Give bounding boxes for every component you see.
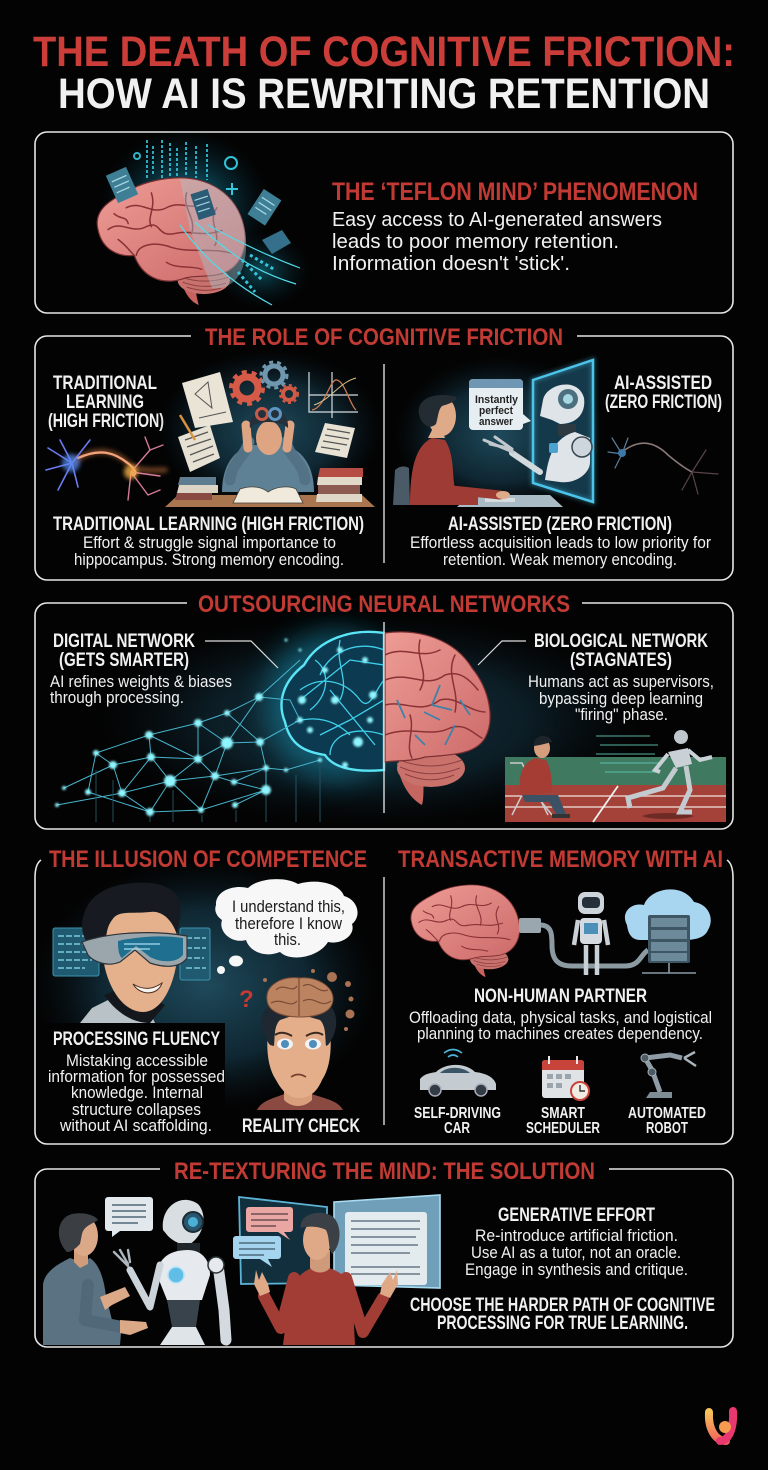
icon: logo [709,1411,733,1441]
label: biological network: "firing" phase. [575,706,668,724]
panel: teflon mind [35,130,733,313]
icon: dim neuron [608,438,718,494]
caption: AI assisted: retention. Weak memory encoding. [443,551,677,569]
panel: illusion of competence and transactive memory [33,846,733,1144]
label: traditional learning: (HIGH FRICTION) [48,411,164,432]
caption: traditional learning [53,514,364,569]
label: digital network: DIGITAL NETWORK [53,631,195,652]
heading: outsourcing: OUTSOURCING NEURAL NETWORKS [198,591,570,618]
caption: AI assisted: Effortless acquisition leads to low priority for [410,534,711,552]
text block: processing fluency: without AI scaffolding. [59,1117,212,1135]
labels: partner examples: ROBOT [646,1120,688,1137]
illustration: worried man with crumbling brain [239,969,354,1110]
thought bubble: I understand this, [232,897,345,916]
heading: illusion of competence: THE ILLUSION OF COMPETENCE [49,846,367,873]
illustration: digital half brain and network [55,630,405,822]
call to action [410,1295,715,1334]
text block: processing fluency [48,1029,225,1135]
label: biological network: bypassing deep learning [539,690,703,708]
thought bubble: this. [274,930,301,949]
text block: processing fluency: structure collapses [72,1101,201,1119]
labels: partner examples: SCHEDULER [526,1120,600,1137]
label: biological network [528,631,714,724]
label: reality check: REALITY CHECK [242,1116,360,1137]
caption: AI assisted [410,514,711,569]
bubble text: answer [479,416,514,428]
label: AI assisted [605,373,722,413]
heading: the solution: RE-TEXTURING THE MIND: THE SOLUTION [174,1158,595,1185]
caption: traditional learning: hippocampus. Strong memory encoding. [74,551,344,569]
illustration: smiling man in AR goggles [53,883,210,1023]
icon: self-driving car [420,1050,496,1096]
bubble text: perfect [479,405,513,417]
label: traditional learning: LEARNING [66,392,144,413]
illustration: student with AI screen [393,357,605,513]
text block: non-human partner [409,986,712,1043]
text block: generative effort: GENERATIVE EFFORT [498,1205,655,1226]
icon: smart scheduler calendar [542,1056,589,1100]
panel: role of cognitive friction [35,324,733,580]
bubble text [475,394,519,428]
text block: processing fluency: knowledge. Internal [71,1084,203,1102]
text block: generative effort: Use AI as a tutor, not an oracle. [471,1244,681,1262]
caption: traditional learning: TRADITIONAL LEARNING (HIGH FRICTION) [53,514,364,535]
text block: teflon mind [332,209,662,275]
label: digital network [50,631,232,707]
title [33,28,735,118]
labels: partner examples: AUTOMATED [628,1105,706,1122]
heading: teflon mind: THE ‘TEFLON MIND’ PHENOMENON [332,178,698,206]
illustration: man reviewing AI panels [233,1195,440,1345]
caption: AI assisted: AI-ASSISTED (ZERO FRICTION) [448,514,672,535]
illustration: biological half brain [385,632,490,805]
text block: processing fluency: Mistaking accessible [66,1052,208,1070]
label: digital network: through processing. [50,689,184,707]
heading: role of friction: THE ROLE OF COGNITIVE FRICTION [205,324,563,351]
thought bubble [215,879,358,974]
label: AI assisted: AI-ASSISTED [614,373,712,394]
thought bubble: therefore I know [235,914,343,933]
label: biological network: Humans act as supervisors, [528,673,714,691]
text block: teflon mind: Easy access to AI-generated answers [332,209,662,231]
illustration: worried man with crumbling brain: ? [239,986,254,1013]
icon: glowing neuron [46,437,165,500]
label: biological network: (STAGNATES) [570,650,672,671]
text block: generative effort [465,1205,688,1279]
illustration: brain with data streams [97,130,310,308]
label: digital network: (GETS SMARTER) [59,650,189,671]
labels: partner examples: CAR [444,1120,470,1137]
text block: processing fluency: PROCESSING FLUENCY [53,1029,220,1050]
call to action: PROCESSING FOR TRUE LEARNING. [437,1313,688,1334]
labels: partner examples [414,1105,706,1137]
bubble text: Instantly [475,394,519,406]
text block: non-human partner: NON-HUMAN PARTNER [474,986,647,1007]
labels: partner examples: SELF-DRIVING [414,1105,501,1122]
text block: processing fluency: information for possessed [48,1068,225,1086]
text block: teflon mind: leads to poor memory retention. [332,231,619,253]
label: biological network: BIOLOGICAL NETWORK [534,631,708,652]
caption: traditional learning: Effort & struggle signal importance to [83,534,336,552]
illustration: brain linked to robot and cloud server [411,885,711,977]
text block: generative effort: Engage in synthesis and critique. [465,1261,688,1279]
illustration: person watching robot run on track [505,730,726,822]
text block: generative effort: Re-introduce artificial friction. [475,1227,678,1245]
panel: re-texturing the mind [35,1158,733,1347]
panel: outsourcing neural networks [35,591,733,829]
icon: automated robot arm [641,1052,696,1098]
text block: non-human partner: Offloading data, physical tasks, and logistical [409,1009,712,1027]
label: traditional learning [48,373,164,432]
illustration: man talking to robot [43,1197,226,1345]
connector: digital label to brain [205,641,278,668]
title: HOW AI IS REWRITING RETENTION [58,70,710,118]
label: traditional learning: TRADITIONAL [53,373,157,394]
label: digital network: AI refines weights & biases [50,673,232,691]
connector: biological label to brain [478,641,526,665]
text block: non-human partner: planning to machines creates dependency. [417,1025,703,1043]
label: AI assisted: (ZERO FRICTION) [605,392,722,413]
illustration: student struggling at desk [158,350,382,510]
text block: teflon mind: Information doesn't 'stick'. [332,253,570,275]
labels: partner examples: SMART [541,1105,585,1122]
backdrop glow: left column [33,860,382,1143]
